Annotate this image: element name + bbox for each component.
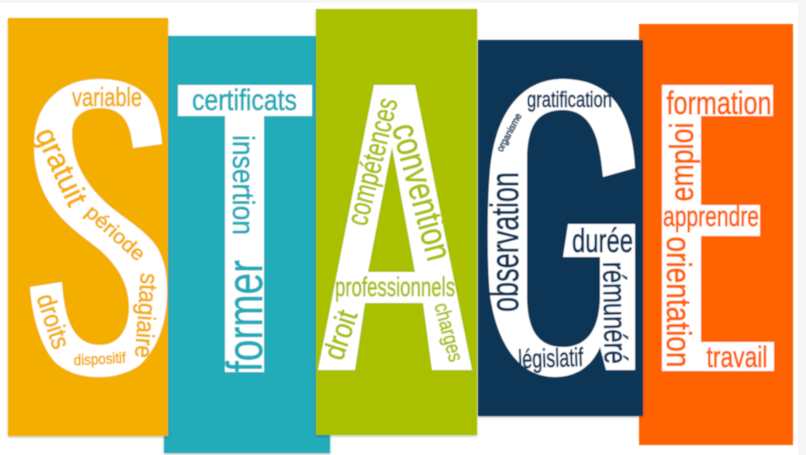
panel: letter A: professionnels xyxy=(335,272,455,302)
panel: letter A: compétences xyxy=(341,95,405,229)
panel: letter A: convention xyxy=(384,119,460,265)
panel: letter G: gratification xyxy=(527,87,612,112)
panel: letter A: droit xyxy=(318,306,365,364)
panel: letter S: variable xyxy=(72,82,142,112)
panel: letter S: gratuit xyxy=(28,122,95,211)
panel: letter T xyxy=(164,36,330,453)
panel: letter E: formation xyxy=(666,85,772,121)
panel: letter S: dispositif xyxy=(73,350,127,369)
panel: letter E: emploi xyxy=(663,122,700,202)
panel: letter G xyxy=(478,40,643,416)
panel: letter S xyxy=(8,18,168,436)
panel: letter T: certificats xyxy=(192,84,297,117)
panel: letter E: travail xyxy=(706,341,768,374)
panel: letter G: législatif xyxy=(518,342,584,374)
panel: letter E: orientation xyxy=(659,236,697,368)
panel: letter E: apprendre xyxy=(663,201,759,233)
panel: letter S: période xyxy=(81,201,149,266)
panel: letter A xyxy=(316,9,477,435)
panel: letter T: insertion xyxy=(226,135,261,235)
panel: letter S: stagiaire xyxy=(129,272,163,359)
panel: letter T: former xyxy=(217,260,273,372)
panel: letter G: rémunéré xyxy=(596,262,634,364)
panel: letter E xyxy=(639,24,793,445)
panel: letter G: organisme xyxy=(495,111,525,154)
panel: letter S: droits xyxy=(31,290,76,352)
panel: letter A: charges xyxy=(429,300,467,364)
panel: letter G: observation xyxy=(484,172,527,312)
panel: letter G: durée xyxy=(572,222,633,259)
